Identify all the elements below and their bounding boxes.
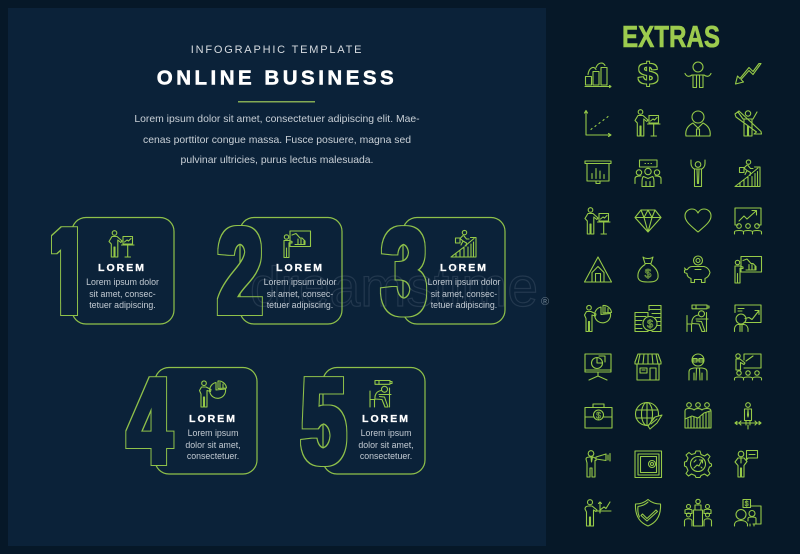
icon: presenter with declining chart — [284, 231, 310, 258]
text 3: sit amet, consec- — [431, 289, 497, 299]
icon: globe — [636, 402, 662, 429]
icon: briefcase — [585, 404, 612, 428]
step 4 — [127, 352, 257, 489]
icon: meeting table — [684, 499, 712, 526]
text 2: tetuer adipiscing. — [267, 300, 333, 310]
numeral 4: 4 — [127, 352, 172, 489]
heading 2: LOREM — [276, 262, 324, 274]
step 1 — [51, 216, 175, 325]
icon: presenter with audience — [734, 354, 762, 380]
icon: runner on growth chart — [735, 160, 760, 186]
text 4: consectetuer. — [187, 451, 239, 461]
icon: presenter with declining chart — [735, 256, 762, 283]
intro paragraph — [134, 114, 420, 166]
background panel — [8, 8, 546, 546]
icon: team over chart — [685, 403, 711, 428]
numeral 1: 1 — [43, 203, 91, 340]
heading 1: LOREM — [98, 262, 146, 274]
heading 4: LOREM — [189, 413, 237, 425]
text 4: Lorem ipsum — [188, 428, 238, 438]
icon: briefcase: $ — [596, 410, 601, 420]
icon: person at desk — [370, 380, 392, 407]
text 3: tetuer adipiscing. — [431, 300, 497, 310]
icon: heart — [685, 209, 711, 232]
icon: bar chart with arc — [585, 63, 611, 88]
box 4 — [155, 368, 257, 474]
numeral 2: 2 — [217, 204, 263, 340]
step 3 — [381, 204, 505, 340]
icon: triangle with arrow — [584, 257, 612, 282]
watermark: ® — [541, 296, 549, 308]
icon grid — [584, 58, 762, 526]
numeral 5: 5 — [300, 354, 347, 490]
icon: person arms out — [685, 62, 711, 88]
text 1: tetuer adipiscing. — [89, 300, 156, 310]
text 4 — [185, 428, 241, 461]
text 5 — [358, 428, 414, 461]
icon: gear — [684, 451, 712, 478]
icon: person with falling arrow — [735, 111, 762, 136]
icon: bust with chart board — [734, 305, 761, 332]
numeral 3: 3 — [381, 204, 427, 340]
icon: presenter — [109, 231, 134, 257]
icon: video call: $ — [745, 501, 749, 508]
step 5 — [300, 354, 425, 490]
icon: businessman bust — [686, 111, 710, 136]
text 2: Lorem ipsum dolor — [264, 277, 336, 287]
icon: presenter at lectern — [585, 208, 610, 234]
icon: person with directional arrows — [735, 403, 761, 429]
icon: piggy bank — [684, 256, 710, 282]
icon: person with pie chart — [584, 305, 612, 332]
step 2 — [217, 204, 342, 340]
icon: scatter axes — [584, 110, 611, 136]
text 5: dolor sit amet, — [358, 440, 414, 450]
icon: person arms raised — [691, 160, 705, 186]
header — [134, 44, 420, 166]
icon: money bag — [638, 257, 658, 282]
icon: person with line chart — [585, 500, 611, 526]
icon: person at desk — [687, 305, 709, 332]
icon: person with megaphone — [586, 451, 610, 477]
intro paragraph: pulvinar ultricies, purus lectus malesuada. — [181, 155, 373, 166]
icon: diamond — [635, 210, 661, 232]
text 2 — [264, 277, 336, 310]
icon: coins stack — [635, 306, 661, 332]
icon: projector screen — [585, 161, 611, 184]
text 5: Lorem ipsum — [361, 428, 411, 438]
intro paragraph: Lorem ipsum dolor sit amet, consectetuer adipiscing elit. Mae- — [134, 114, 420, 125]
text 1: Lorem ipsum dolor — [86, 277, 159, 287]
subtitle: INFOGRAPHIC TEMPLATE — [191, 44, 363, 56]
box 3 — [403, 218, 505, 324]
text 4: dolor sit amet, — [185, 440, 241, 450]
icon: person with speech bubble — [735, 450, 758, 477]
text 1 — [86, 277, 159, 310]
text 5: consectetuer. — [360, 451, 412, 461]
box 5 — [323, 368, 425, 474]
heading 5: LOREM — [362, 413, 410, 425]
watermark: dreamstime — [250, 255, 538, 318]
title rule — [238, 101, 315, 102]
icon: board with audience — [734, 208, 762, 234]
text 3 — [428, 277, 500, 310]
heading 3: LOREM — [440, 262, 488, 274]
icon: safe — [635, 451, 662, 478]
icon: presenter with monitor — [635, 110, 660, 136]
text 3: Lorem ipsum dolor — [428, 277, 500, 287]
extras heading: EXTRAS — [622, 19, 720, 54]
icon: coins stack: $ — [647, 318, 653, 330]
icon: person with glasses — [689, 354, 707, 380]
icon: runner on rising chart — [451, 230, 476, 257]
box 1 — [72, 218, 174, 324]
icon: storefront — [635, 354, 661, 380]
icon: dollar: $ — [638, 58, 658, 91]
icon: shield with check — [635, 500, 661, 526]
box 2 — [240, 218, 342, 324]
text 1: sit amet, consec- — [89, 289, 156, 299]
title: ONLINE BUSINESS — [157, 66, 397, 90]
icon: person with pie chart — [200, 381, 226, 407]
icon: monitor with pie — [585, 354, 611, 380]
intro paragraph: cenas porttitor congue massa. Fusce posuere, magna sed — [143, 135, 411, 146]
icon: zigzag arrow down — [736, 64, 761, 84]
icon: video call — [734, 500, 761, 526]
icon: team with speech bubble — [635, 160, 661, 186]
text 2: sit amet, consec- — [267, 289, 333, 299]
icon: money bag: $ — [645, 266, 652, 280]
